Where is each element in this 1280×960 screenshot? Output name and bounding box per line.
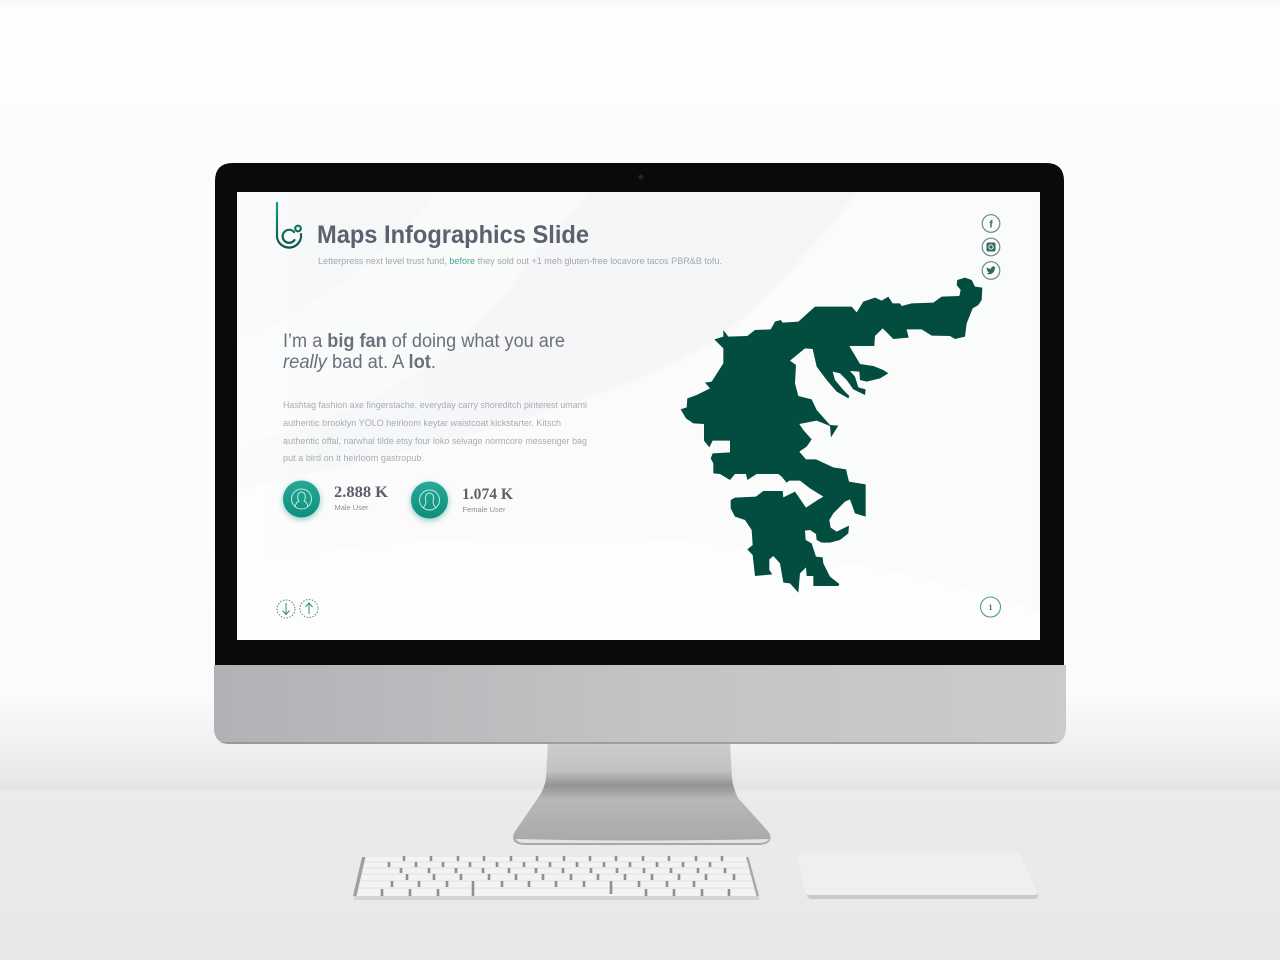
stat: female user [410,482,513,521]
title: Maps Infographics Slide [317,221,589,249]
webcam [638,174,644,180]
heading [283,331,565,373]
icon: male user [282,480,320,520]
body paragraph: authentic brooklyn YOLO heirloom keytar waistcoat kickstarter. Kitsch [283,418,561,428]
monitor chin [214,665,1066,744]
social icons [982,215,1000,279]
trackpad [797,853,1038,899]
heading: I’m a big fan of doing what you are [283,331,565,352]
stat value: 2.888 K [334,484,388,501]
map [681,278,982,593]
keyboard [353,856,759,900]
body paragraph: put a bird on it heirloom gastropub. [283,453,424,463]
monitor stand [513,742,771,845]
stat value: 1.074 K [462,486,513,503]
monitor bezel [215,163,1064,665]
body paragraph: Hashtag fashion axe fingerstache, everyday carry shoreditch pinterest umami [283,400,587,410]
body paragraph [283,400,587,463]
icon: facebook: f [989,220,993,230]
icon: female user [410,482,448,521]
subtitle: Letterpress next level trust fund, before they sold out +1 meh gluten-free locavore tacos PBR&B tofu. [318,256,722,266]
icon: twitter [982,262,1000,279]
arrow: up button [300,600,318,618]
stat label: Male User [334,505,369,512]
page number [980,597,1000,617]
monitor [214,163,1066,845]
body paragraph: authentic offal, narwhal tilde etsy four loko selvage normcore messenger bag [283,436,587,446]
arrow: down button [277,600,295,618]
slide screen [237,192,1040,640]
page number: 1 [988,603,992,612]
heading: really bad at. A lot. [283,352,436,373]
icon: instagram [982,238,1000,256]
background: desk surface [0,790,1280,960]
logo [277,203,301,248]
stat label: Female User [462,507,506,514]
stat: male user [282,480,388,520]
